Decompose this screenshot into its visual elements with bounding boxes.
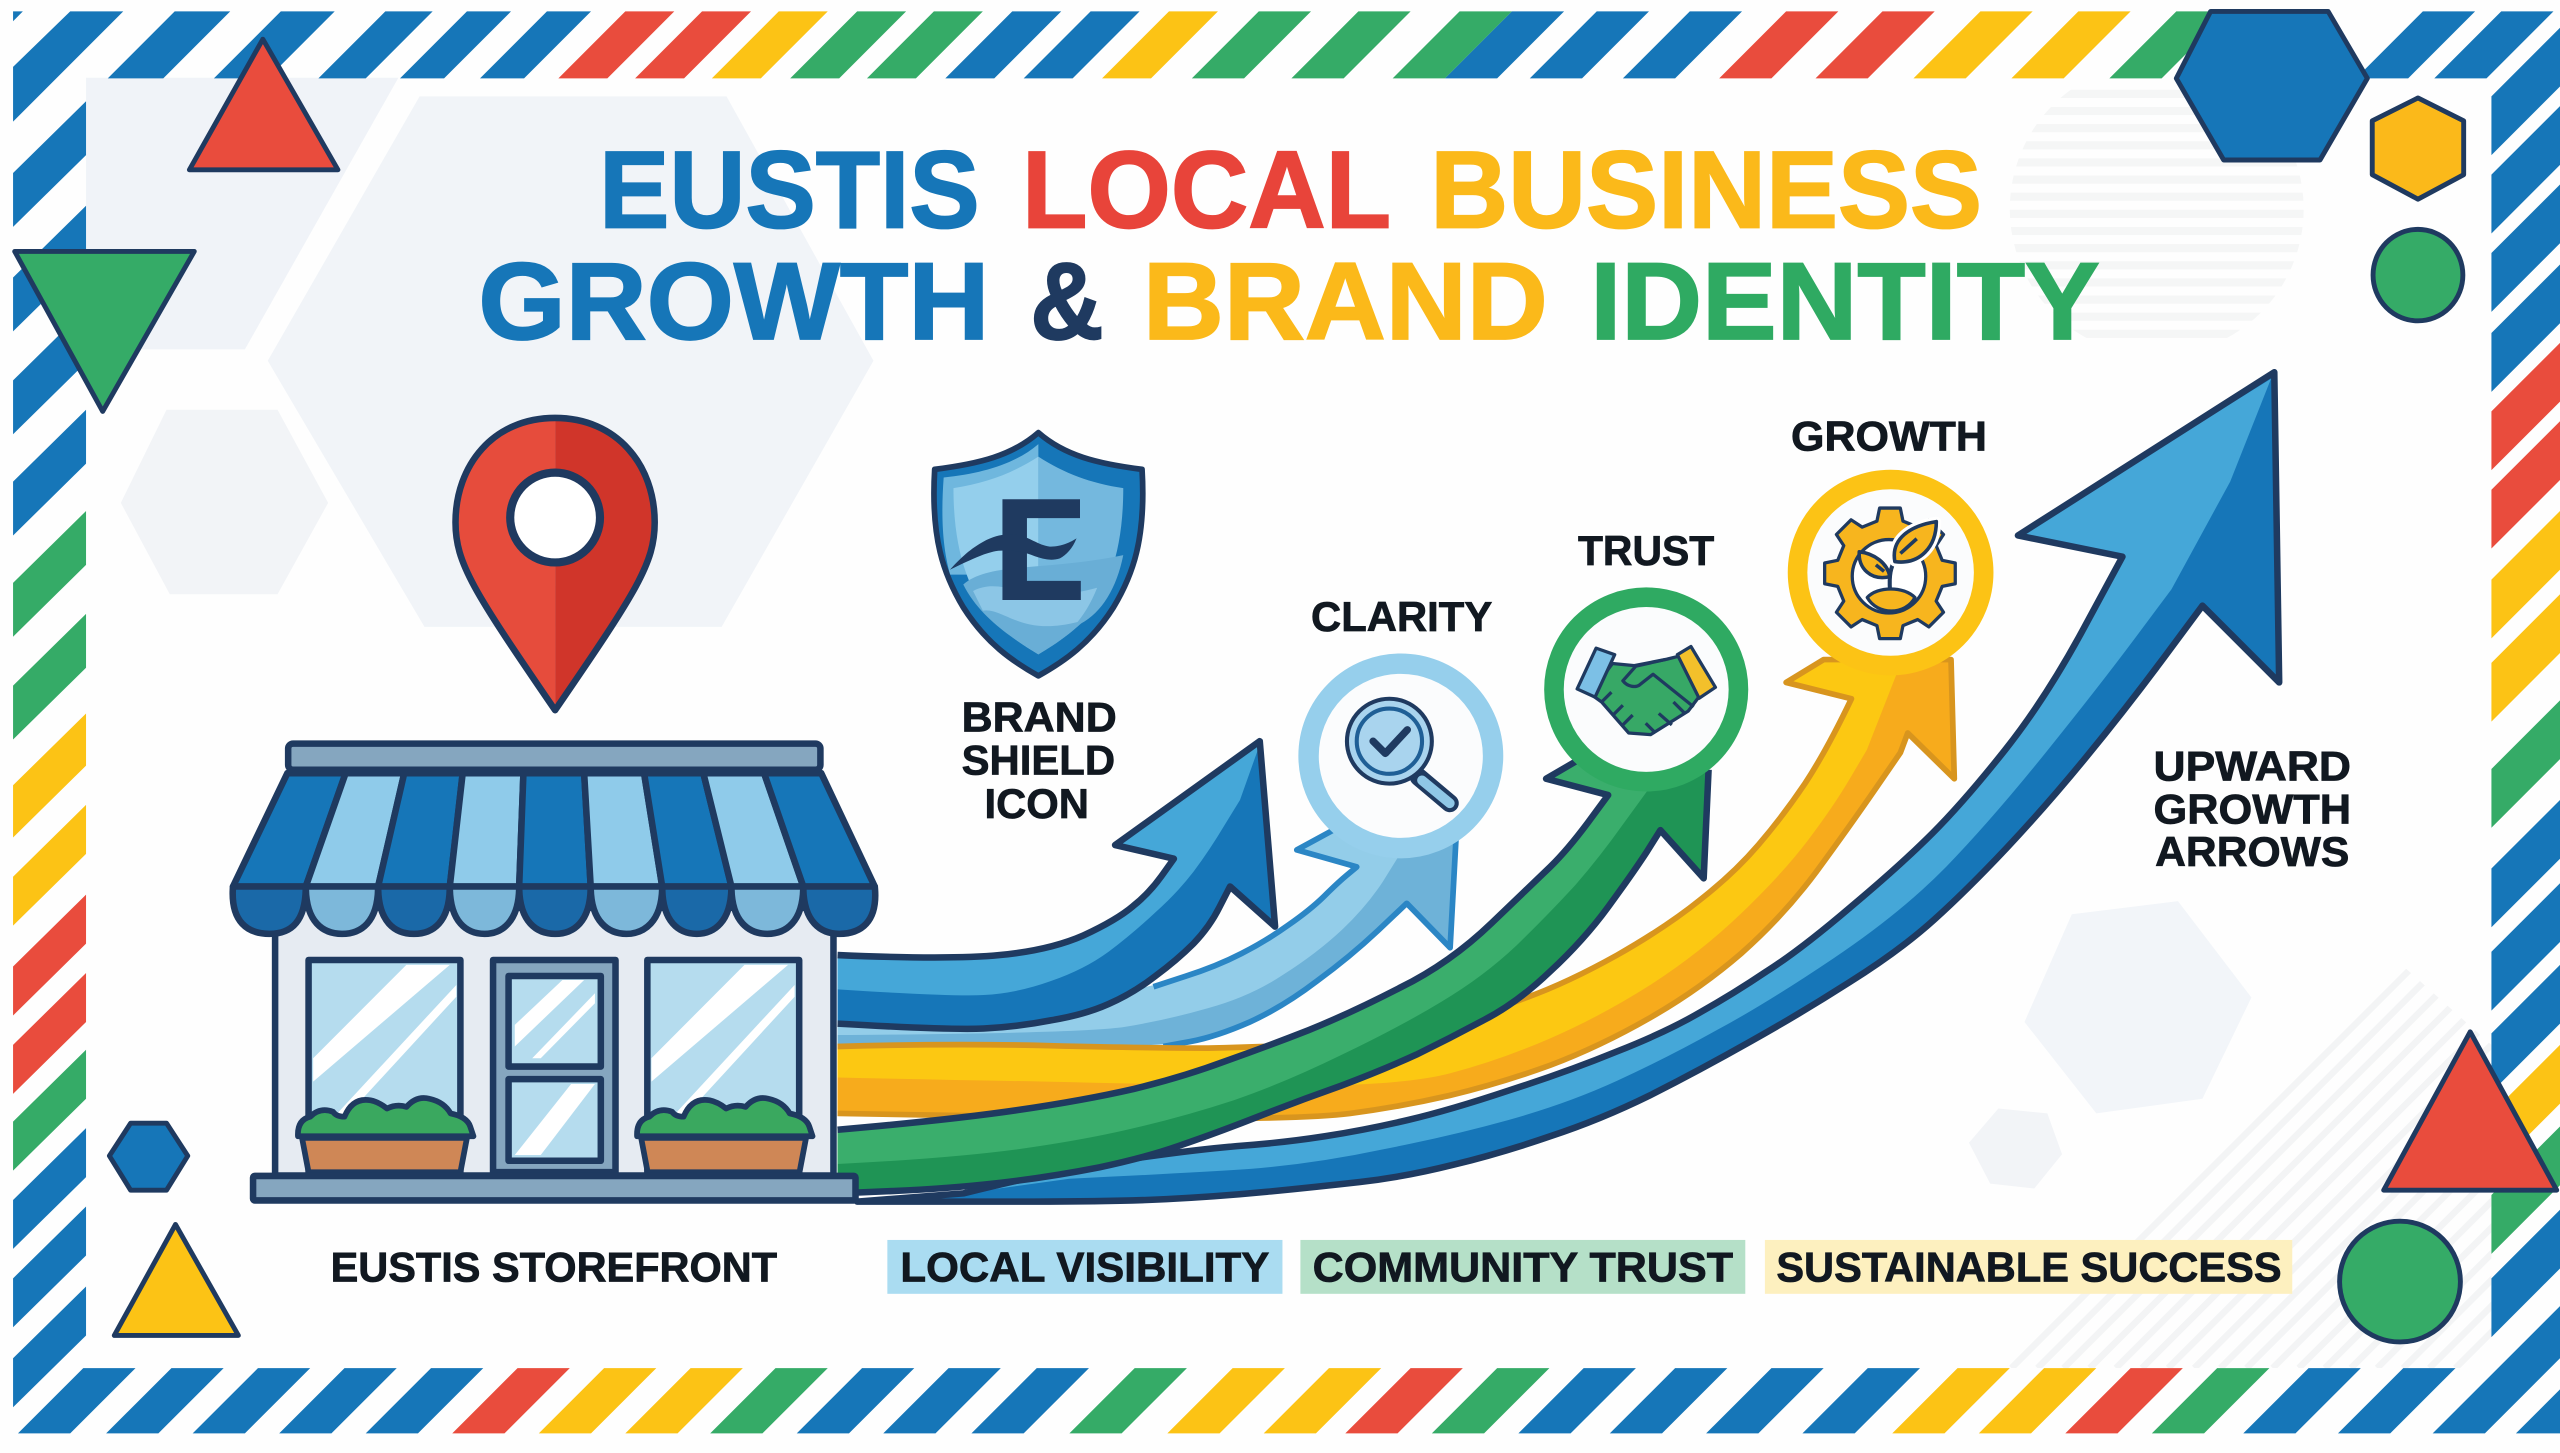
door — [493, 960, 616, 1172]
right planter — [637, 1098, 813, 1172]
icon: brand shield — [934, 433, 1143, 676]
decorative shape: green circle top right — [2373, 229, 2463, 321]
arrow: brand blue — [838, 741, 1275, 1029]
tag: community trust: COMMUNITY TRUST — [1313, 1244, 1733, 1291]
decorative shape: red triangle bottom right — [2384, 1032, 2557, 1190]
decorative shape: yellow triangle bottom left — [114, 1224, 238, 1335]
tag: sustainable success: SUSTAINABLE SUCCESS — [1776, 1244, 2282, 1291]
left window — [309, 960, 460, 1172]
title: EUSTIS — [599, 130, 980, 252]
label: upward growth arrows: UPWARD — [2153, 742, 2351, 789]
title: LOCAL — [1022, 130, 1391, 252]
icon: magnifying glass with check — [1347, 699, 1450, 803]
icon: handshake — [1577, 647, 1715, 735]
illustration: storefront — [233, 744, 875, 1200]
arrow: sustainable success yellow — [838, 660, 1954, 1119]
label: clarity: CLARITY — [1311, 593, 1492, 640]
decorative shape: yellow hexagon — [2372, 98, 2464, 199]
title: BRAND — [1143, 241, 1548, 363]
title — [478, 130, 2100, 363]
left planter — [298, 1098, 473, 1172]
title: GROWTH — [478, 241, 989, 363]
right window — [647, 960, 799, 1172]
badge: clarity ring — [1309, 664, 1493, 848]
badge: trust ring — [1554, 597, 1738, 782]
roof bar — [288, 744, 820, 770]
title: BUSINESS — [1430, 130, 1982, 252]
decorative shape: blue hexagon left — [109, 1123, 188, 1190]
label: brand shield icon — [962, 693, 1117, 827]
icon: gear with sprout — [1825, 508, 1955, 639]
awning — [233, 773, 875, 934]
label: upward growth arrows — [2153, 742, 2351, 875]
badge: growth ring — [1798, 479, 1984, 666]
label: growth: GROWTH — [1791, 413, 1987, 460]
decorative shape: red triangle top left — [189, 39, 338, 170]
label: brand shield icon: SHIELD — [962, 737, 1115, 784]
title: & — [1030, 241, 1104, 363]
arrow: community trust green — [838, 762, 1709, 1193]
storefront wall — [275, 908, 833, 1175]
title: IDENTITY — [1590, 241, 2100, 363]
tag: local visibility: LOCAL VISIBILITY — [900, 1244, 1270, 1291]
label: trust: TRUST — [1578, 527, 1714, 574]
base step — [253, 1176, 856, 1200]
decorative shape: green inverted triangle — [15, 251, 194, 411]
label: upward growth arrows: ARROWS — [2155, 828, 2349, 875]
decorative shape: green circle bottom right — [2340, 1221, 2460, 1342]
arrow: upward growth big blue — [857, 372, 2279, 1202]
decorative shape: blue hexagon top right — [2176, 11, 2367, 160]
label: brand shield icon: ICON — [984, 780, 1089, 827]
label: eustis storefront: EUSTIS STOREFRONT — [331, 1244, 777, 1291]
icon: map location pin — [456, 418, 655, 710]
label: upward growth arrows: GROWTH — [2153, 786, 2351, 833]
label: brand shield icon: BRAND — [962, 693, 1117, 740]
arrow: local visibility light blue — [838, 829, 1456, 1046]
